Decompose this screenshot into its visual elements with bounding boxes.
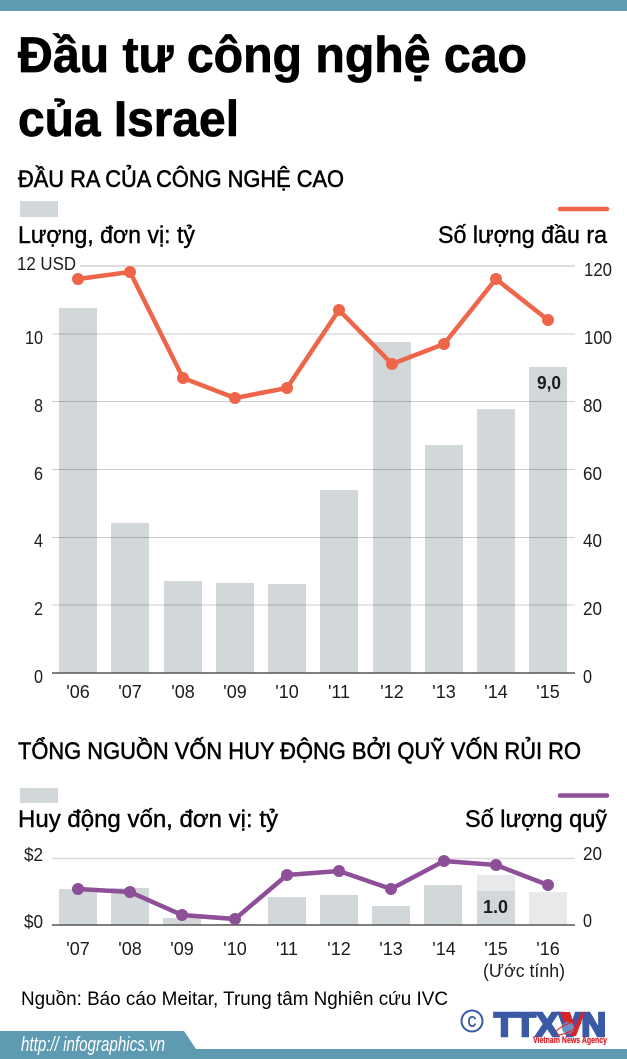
title: của Israel <box>18 91 239 147</box>
year labels <box>66 939 560 959</box>
title <box>18 27 527 147</box>
left axis labels: 0 <box>34 667 43 687</box>
right axis labels: 40 <box>583 531 602 551</box>
footer band with URL tab: http:// infographics.vn <box>21 1034 165 1056</box>
left axis labels <box>17 254 76 687</box>
baseline <box>52 672 575 674</box>
year labels: '16 <box>536 939 560 959</box>
left axis labels: 2 <box>34 599 43 619</box>
legend: capital bars: Huy động vốn, đơn vị: tỷ <box>18 806 278 833</box>
chart: high-tech exits <box>17 254 612 702</box>
heading: venture capital funds: TỔNG NGUỒN VỐN HUY ĐỘNG BỞI QUỸ VỐN RỦI RO <box>18 736 581 765</box>
year labels: '09 <box>223 682 247 702</box>
year labels: '12 <box>380 682 404 702</box>
right axis labels: 120 <box>584 260 612 280</box>
legend: capital bars <box>18 788 278 833</box>
left axis labels: $2 <box>24 845 43 865</box>
title: Đầu tư công nghệ cao <box>18 27 527 83</box>
right axis labels: 0 <box>583 911 592 931</box>
bars: exit volume <box>59 308 567 673</box>
value label: 1.0: 1.0 <box>483 897 508 917</box>
year labels: '15 <box>536 682 560 702</box>
left axis labels: 12 USD <box>17 254 76 274</box>
year labels: '06 <box>66 682 90 702</box>
left axis labels: 10 <box>25 328 43 348</box>
left axis labels: $0 <box>24 912 43 932</box>
estimate note: (Ước tính) <box>483 961 565 981</box>
year labels: '13 <box>432 682 456 702</box>
right axis labels: 60 <box>583 464 602 484</box>
year labels: '10 <box>223 939 247 959</box>
right axis labels: 20 <box>583 599 602 619</box>
year labels: '13 <box>379 939 403 959</box>
year labels: '11 <box>328 682 350 702</box>
year labels: '08 <box>118 939 142 959</box>
legend: bars <box>18 201 195 249</box>
year labels: '14 <box>432 939 456 959</box>
footer band with URL tab <box>0 1031 627 1059</box>
top band <box>0 0 627 11</box>
left axis labels: 8 <box>34 396 43 416</box>
right axis labels: 20 <box>583 844 602 864</box>
year labels: '08 <box>171 682 195 702</box>
left axis labels: 4 <box>34 531 43 551</box>
copyright mark: C <box>468 1014 477 1031</box>
left axis labels: 6 <box>34 464 43 484</box>
line: number of exits <box>72 266 554 404</box>
top grid line <box>52 858 575 860</box>
year labels: '07 <box>118 682 142 702</box>
legend: line: Số lượng đầu ra <box>438 222 608 249</box>
baseline <box>52 924 575 926</box>
wordmark: TTXVN <box>494 1006 606 1043</box>
right axis labels: 100 <box>584 328 612 348</box>
bars: capital raised <box>59 875 567 925</box>
agency name: Vietnam News Agency <box>533 1035 607 1045</box>
year labels: '10 <box>275 682 299 702</box>
value label: 9,0: 9,0 <box>537 373 561 393</box>
year labels: '07 <box>66 939 90 959</box>
right axis labels: 80 <box>583 396 602 416</box>
legend: bars: Lượng, đơn vị: tỷ <box>18 222 195 249</box>
line: number of funds <box>72 855 554 925</box>
right axis labels: 0 <box>583 667 592 687</box>
right axis labels <box>583 844 602 931</box>
year labels: '14 <box>484 682 508 702</box>
legend: funds line: Số lượng quỹ <box>465 806 607 833</box>
grid lines <box>52 266 575 605</box>
year labels: '11 <box>276 939 298 959</box>
left axis labels <box>24 845 43 932</box>
year labels: '15 <box>484 939 508 959</box>
year labels: '09 <box>170 939 194 959</box>
heading: high-tech exits: ĐẦU RA CỦA CÔNG NGHỆ CAO <box>18 164 344 193</box>
logo: TTXVN <box>462 1006 607 1045</box>
right axis labels <box>583 260 612 687</box>
chart: capital raised <box>24 844 602 981</box>
source: Nguồn: Báo cáo Meitar, Trung tâm Nghiên cứu IVC <box>21 989 448 1010</box>
year labels: '12 <box>327 939 351 959</box>
year labels <box>66 682 560 702</box>
copyright mark <box>462 1010 482 1032</box>
